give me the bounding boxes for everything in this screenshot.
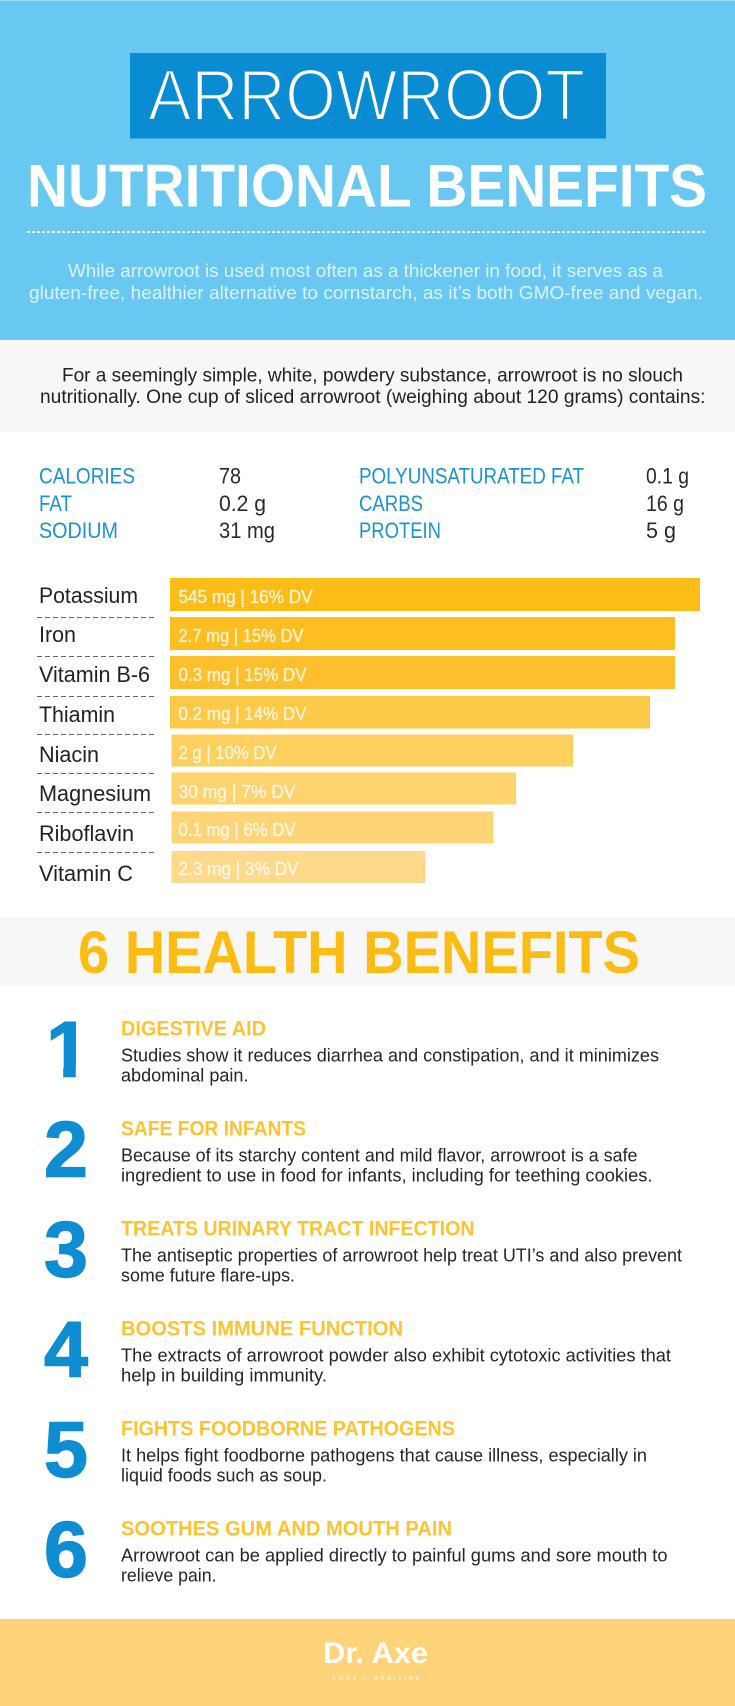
bar: magnesium xyxy=(39,772,516,806)
nutrition facts table: 16 g xyxy=(646,491,684,516)
panel: header xyxy=(0,0,735,340)
bar: vitamin b-6: 0.3 mg | 15% DV xyxy=(178,665,306,685)
intro text: While arrowroot is used most often as a thickener in food, it serves as a xyxy=(68,260,664,281)
bar: vitamin b-6: Vitamin B-6 xyxy=(39,662,150,687)
benefit 6: SOOTHES GUM AND MOUTH PAIN xyxy=(121,1518,452,1540)
bar: iron: 2.7 mg | 15% DV xyxy=(178,626,304,646)
nutrition facts table: 0.1 g xyxy=(646,464,689,488)
bar: vitamin b-6 xyxy=(39,656,675,689)
nutrition facts table: FAT xyxy=(39,491,72,516)
bar: magnesium: Magnesium xyxy=(39,781,151,806)
bar: riboflavin: 0.1 mg | 6% DV xyxy=(178,820,296,840)
benefit 3: TREATS URINARY TRACT INFECTION xyxy=(121,1218,474,1240)
panel: nutrition intro xyxy=(0,340,735,432)
nutrition facts table: 0.2 g xyxy=(219,491,266,516)
bar chart: vitamins and minerals xyxy=(37,578,700,886)
benefit 2: SAFE FOR INFANTS xyxy=(121,1118,306,1140)
nutrition facts table: 5 g xyxy=(646,518,676,543)
benefit 5: liquid foods such as soup. xyxy=(121,1466,327,1486)
nutrition facts table: SODIUM xyxy=(39,518,118,543)
benefit 5: 5 xyxy=(44,1404,88,1494)
bar: iron: Iron xyxy=(39,622,76,647)
bar: iron xyxy=(39,617,675,650)
panel: nutrition intro: nutritionally. One cup of sliced arrowroot (weighing about 120 grams) contains: xyxy=(40,387,706,408)
title box: arrowroot: ARROWROOT xyxy=(148,56,585,136)
nutrition facts table: 31 mg xyxy=(219,518,275,543)
benefit 4: BOOSTS IMMUNE FUNCTION xyxy=(121,1318,403,1340)
bar: niacin xyxy=(39,734,573,767)
bar: potassium xyxy=(39,578,700,611)
benefit 5: It helps fight foodborne pathogens that cause illness, especially in xyxy=(121,1446,647,1466)
benefit 1: Studies show it reduces diarrhea and constipation, and it minimizes xyxy=(121,1046,659,1066)
intro text: gluten-free, healthier alternative to cornstarch, as it’s both GMO-free and vegan. xyxy=(29,282,703,303)
benefit 6 xyxy=(44,1504,668,1594)
bar: thiamin: 0.2 mg | 14% DV xyxy=(178,704,306,724)
benefit 6: Arrowroot can be applied directly to painful gums and sore mouth to xyxy=(121,1546,668,1566)
benefit 2: 2 xyxy=(44,1104,88,1194)
heading: 6 health benefits: 6 HEALTH BENEFITS xyxy=(78,919,640,986)
benefit 1: DIGESTIVE AID xyxy=(121,1018,266,1040)
bar: potassium: Potassium xyxy=(39,583,138,608)
logo: dr. axe: FOOD + MEDICINE xyxy=(333,1676,420,1682)
benefit 2: ingredient to use in food for infants, including for teething cookies. xyxy=(121,1166,652,1186)
bar: thiamin xyxy=(39,696,650,728)
benefit 6: 6 xyxy=(44,1504,88,1594)
bar: vitamin c: 2.3 mg | 3% DV xyxy=(178,859,298,879)
benefit 3: 3 xyxy=(44,1204,88,1294)
nutrition facts table: POLYUNSATURATED FAT xyxy=(359,464,584,488)
bar: vitamin c xyxy=(39,851,426,886)
nutrition facts table: PROTEIN xyxy=(359,518,441,543)
bar: riboflavin: Riboflavin xyxy=(39,821,134,846)
bar: riboflavin xyxy=(39,812,494,846)
benefit 3 xyxy=(44,1204,682,1294)
intro text xyxy=(29,260,703,303)
bar: niacin: 2 g | 10% DV xyxy=(178,743,276,763)
benefit 1: 1 xyxy=(46,1004,90,1094)
benefit 5: FIGHTS FOODBORNE PATHOGENS xyxy=(121,1418,455,1440)
benefit 2: Because of its starchy content and mild flavor, arrowroot is a safe xyxy=(121,1146,638,1166)
panel: footer xyxy=(0,1619,735,1706)
nutrition facts table xyxy=(39,464,689,543)
benefit 1 xyxy=(40,1004,659,1094)
nutrition facts table: CALORIES xyxy=(39,464,135,488)
benefit 4: help in building immunity. xyxy=(121,1366,327,1386)
bar: potassium: 545 mg | 16% DV xyxy=(178,587,312,607)
panel: nutrition intro: For a seemingly simple, white, powdery substance, arrowroot is no slouch xyxy=(62,366,683,386)
nutrition facts table: 78 xyxy=(219,464,241,488)
bar: thiamin: Thiamin xyxy=(39,702,115,727)
bar: vitamin c: Vitamin C xyxy=(39,861,133,886)
benefit 3: some future flare-ups. xyxy=(121,1266,295,1286)
benefit 2 xyxy=(44,1104,652,1194)
benefit 5 xyxy=(44,1404,647,1494)
heading: nutritional benefits: NUTRITIONAL BENEFITS xyxy=(27,152,707,220)
benefit 4: The extracts of arrowroot powder also exhibit cytotoxic activities that xyxy=(121,1346,671,1366)
benefit 4 xyxy=(44,1304,671,1394)
benefit 3: The antiseptic properties of arrowroot help treat UTI’s and also prevent xyxy=(121,1246,682,1266)
logo: dr. axe: Dr. Axe xyxy=(323,1637,428,1670)
bar: niacin: Niacin xyxy=(39,742,99,767)
benefit 1: abdominal pain. xyxy=(121,1066,248,1086)
benefit 4: 4 xyxy=(44,1304,88,1394)
benefit 6: relieve pain. xyxy=(121,1566,216,1586)
nutrition facts table: CARBS xyxy=(359,491,423,516)
bar: magnesium: 30 mg | 7% DV xyxy=(178,782,296,802)
